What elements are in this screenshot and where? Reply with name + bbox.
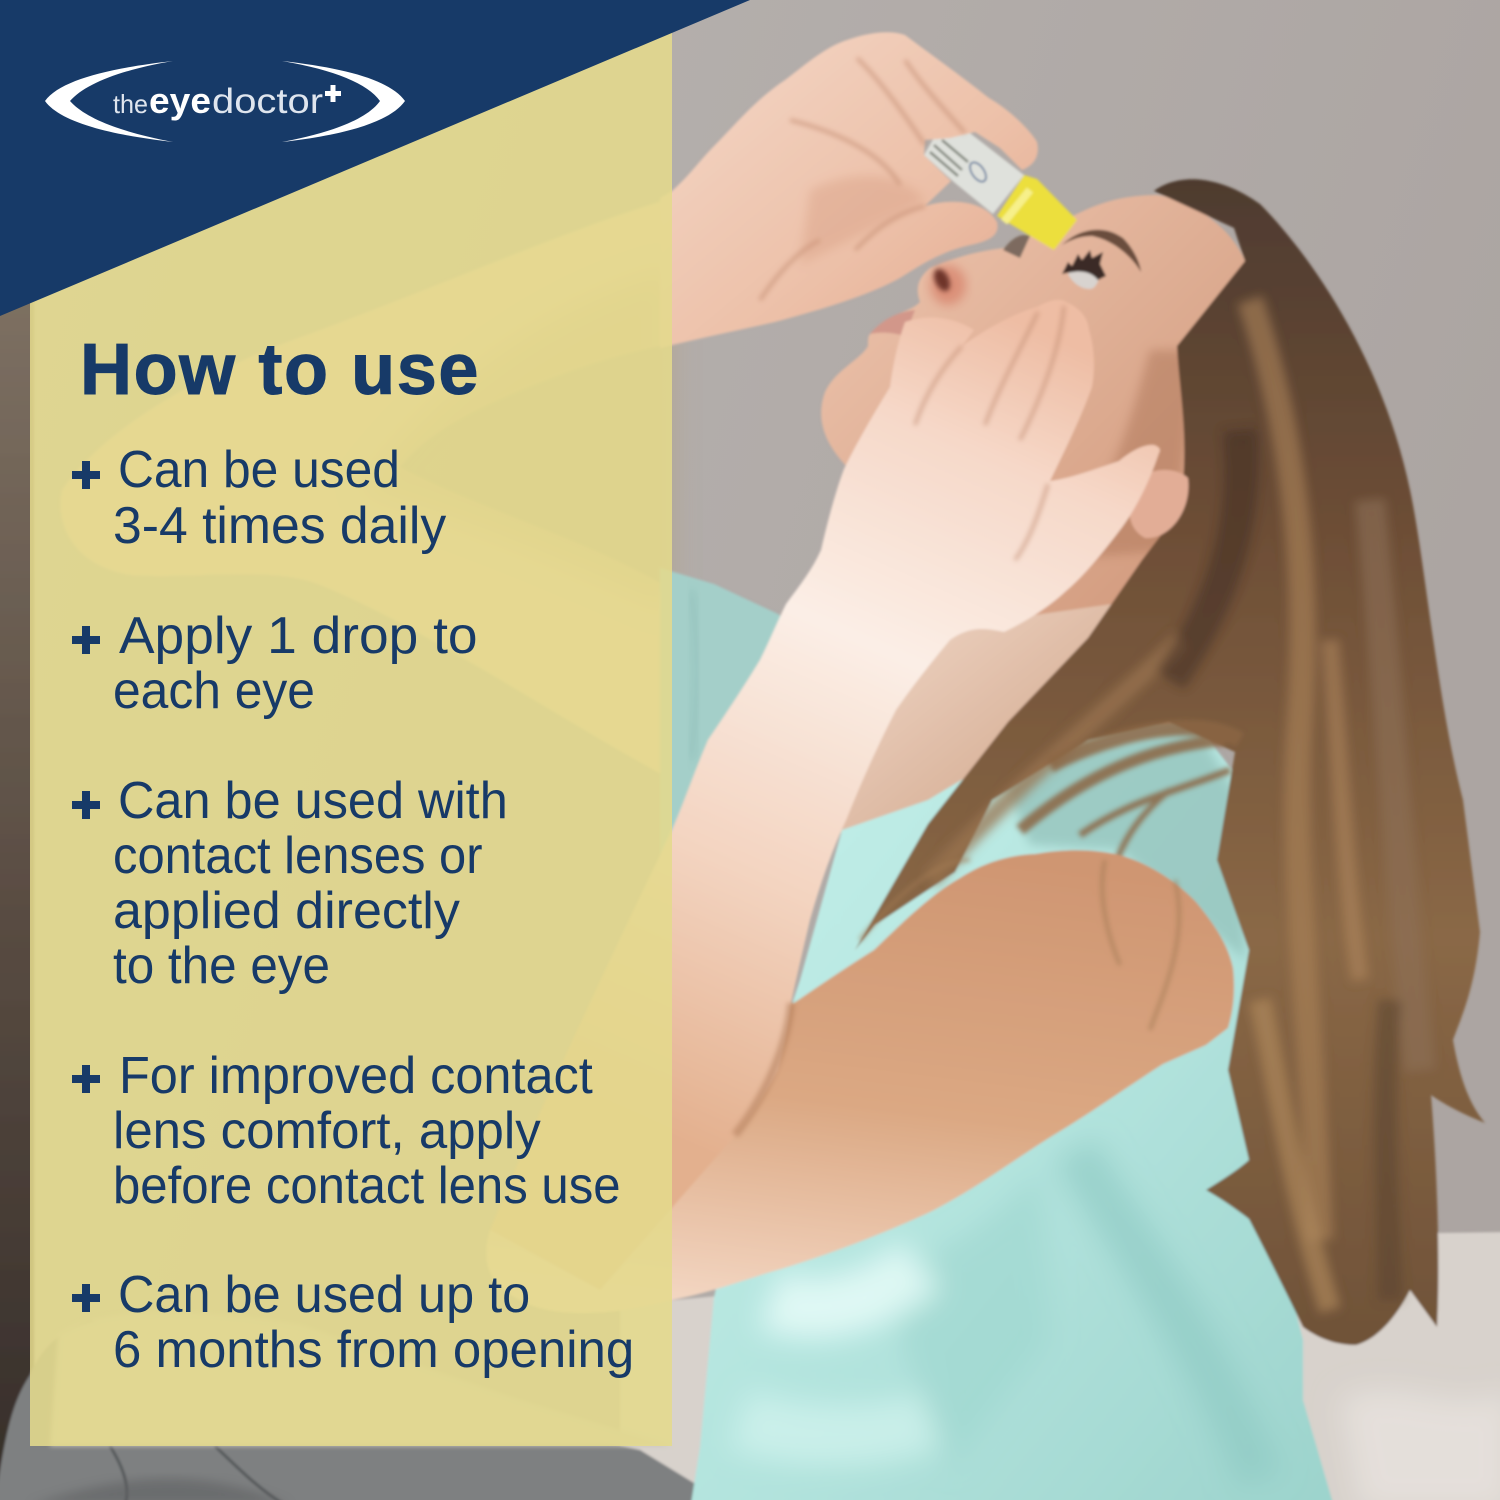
text: Can be used with: [118, 772, 508, 830]
icon: plus: [72, 1065, 100, 1093]
text: applied directly: [113, 882, 460, 940]
trouser shadow: [30, 1479, 290, 1500]
logo word: the: the: [113, 89, 148, 119]
logo left crescent: [45, 61, 173, 142]
bed highlight: [1340, 1390, 1500, 1500]
forearm and lower hand: [490, 300, 1160, 1290]
eye: [1068, 267, 1100, 289]
text: 6 months from opening: [113, 1321, 634, 1379]
bullet 3: [72, 772, 508, 995]
text: Can be used: [118, 441, 400, 499]
upper shirt sleeve: [660, 568, 810, 860]
text: Can be used up to: [118, 1266, 530, 1324]
upper hand: [660, 32, 1038, 348]
shirt shading: [740, 1150, 1260, 1480]
logo word: doctor: doctor: [212, 82, 323, 121]
icon: plus: [72, 791, 100, 819]
ghost: lower light shape: [50, 1313, 672, 1446]
bullet 4: [72, 1047, 621, 1215]
text: Apply 1 drop to: [119, 607, 478, 665]
text: each eye: [113, 662, 315, 720]
bullet 5: [72, 1266, 634, 1379]
upper arm: [486, 850, 1234, 1313]
bottle body: [924, 130, 1024, 214]
cheek shade near hair: [1060, 350, 1200, 560]
upper finger gaps: [760, 58, 965, 300]
eye drop bottle: [924, 130, 1077, 250]
text: before contact lens use: [113, 1157, 621, 1215]
text: lens comfort, apply: [113, 1102, 541, 1160]
text: to the eye: [113, 937, 330, 995]
elbow crease shadow: [735, 1003, 791, 1135]
bullet 2: [72, 607, 478, 720]
hair over arm: [860, 860, 1179, 1030]
grey trousers: [0, 1320, 730, 1500]
bottle cap: [997, 175, 1077, 250]
nostril: [931, 266, 953, 294]
ghost: shaded elbow crease: [360, 270, 672, 610]
bottle label text: [930, 140, 968, 176]
eyebrow: [1062, 230, 1141, 272]
far brow: [1003, 235, 1030, 258]
shirt body: [690, 722, 1335, 1500]
logo word: eye: eye: [149, 80, 211, 121]
ear: [1129, 470, 1188, 538]
bottle label logo: [967, 160, 989, 184]
logo plus: [325, 85, 341, 102]
face: [821, 195, 1245, 620]
navy header triangle: [0, 0, 750, 316]
lower finger gaps: [915, 306, 1064, 560]
hair over shoulder: [1020, 728, 1240, 950]
shoulder shade: [1000, 725, 1245, 960]
lips: [870, 310, 915, 336]
ghost: left arm behind panel: [60, 198, 672, 780]
bed: [620, 1232, 1500, 1500]
hair: [855, 179, 1485, 1345]
bullet 1: [72, 441, 446, 555]
logo right crescent: [282, 61, 405, 142]
nose shading: [930, 265, 966, 305]
icon: plus: [72, 626, 100, 654]
eyelashes: [1062, 250, 1106, 280]
trouser folds: [110, 1446, 285, 1500]
cap highlight: [1004, 190, 1030, 222]
palm shade: [800, 176, 925, 265]
icon: plus: [72, 1284, 100, 1312]
text: For improved contact: [119, 1047, 593, 1105]
translucent yellow panel: [30, 0, 672, 1446]
chest and neck: [835, 540, 1200, 835]
left dark strip: [0, 290, 34, 1500]
logo: [45, 61, 405, 142]
text: 3-4 times daily: [113, 497, 446, 555]
heading: How to use: [80, 330, 480, 410]
hair strands: [930, 300, 1420, 1310]
icon: plus: [72, 461, 100, 489]
sleeve fold: [690, 590, 698, 760]
text: contact lenses or: [113, 827, 483, 885]
